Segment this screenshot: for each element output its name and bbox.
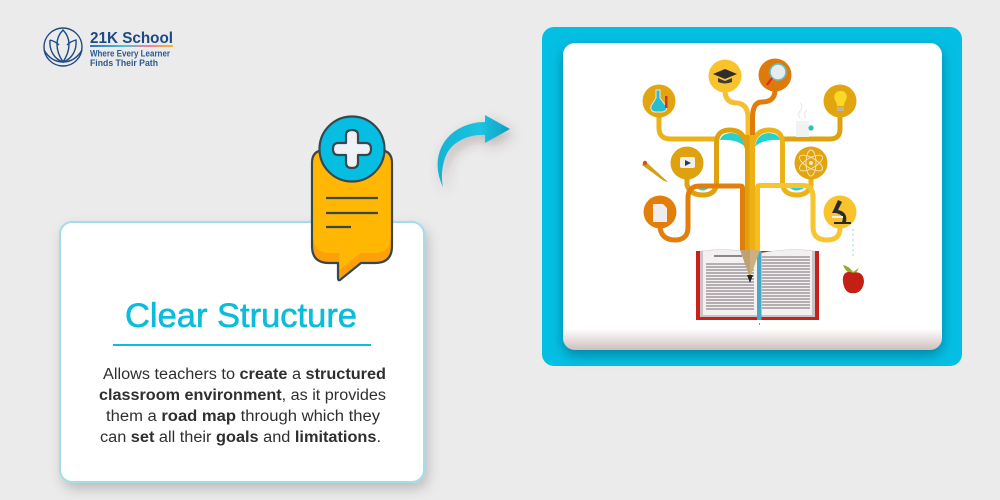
teal arches xyxy=(697,133,804,190)
body line 2: classroom environment , as it provides xyxy=(99,387,386,404)
logo tagline line 2: Finds Their Path xyxy=(90,58,158,68)
logo gradient rule xyxy=(90,45,173,47)
icon: graduation cap xyxy=(708,60,742,92)
icon: magnifier xyxy=(758,58,792,92)
bubble front layer xyxy=(313,152,391,270)
book xyxy=(696,249,819,325)
icon: lotus in circle xyxy=(44,28,82,66)
bubble back layer xyxy=(312,150,392,280)
panel: clear structure card xyxy=(60,222,424,482)
icon: atom xyxy=(794,146,828,180)
panel: blue frame xyxy=(542,27,962,366)
bubble text lines xyxy=(326,198,378,227)
icon: small pencil xyxy=(642,161,668,182)
heading: Clear Structure xyxy=(125,297,357,335)
body text xyxy=(99,366,386,446)
body line 3: them a road map through which they xyxy=(106,408,380,425)
icon: speech bubble with plus xyxy=(312,116,392,280)
icon: document xyxy=(644,196,676,228)
icon: play button xyxy=(670,146,704,180)
icon: light bulb xyxy=(824,84,856,118)
pencil xyxy=(736,135,760,283)
icon: apple xyxy=(843,265,864,293)
illustration: pencil tree and book xyxy=(642,58,864,325)
icon: microscope xyxy=(824,196,856,228)
logo name: 21K School xyxy=(90,30,173,47)
branches xyxy=(659,90,840,240)
body line 4: can set all their goals and limitations . xyxy=(100,429,381,446)
logo tagline line 1: Where Every Learner xyxy=(90,48,170,58)
plus sign xyxy=(333,130,371,168)
plus circle xyxy=(320,116,384,182)
icon: coffee mug xyxy=(796,103,814,137)
logo: 21K School xyxy=(44,28,173,68)
panel: white inner frame xyxy=(563,43,942,350)
heading underline xyxy=(113,344,371,346)
icon: flask xyxy=(642,84,676,118)
arrow: curved pointing right xyxy=(438,115,510,187)
body line 1: Allows teachers to create a structured xyxy=(103,366,386,383)
icon: dotted stem xyxy=(852,229,854,259)
